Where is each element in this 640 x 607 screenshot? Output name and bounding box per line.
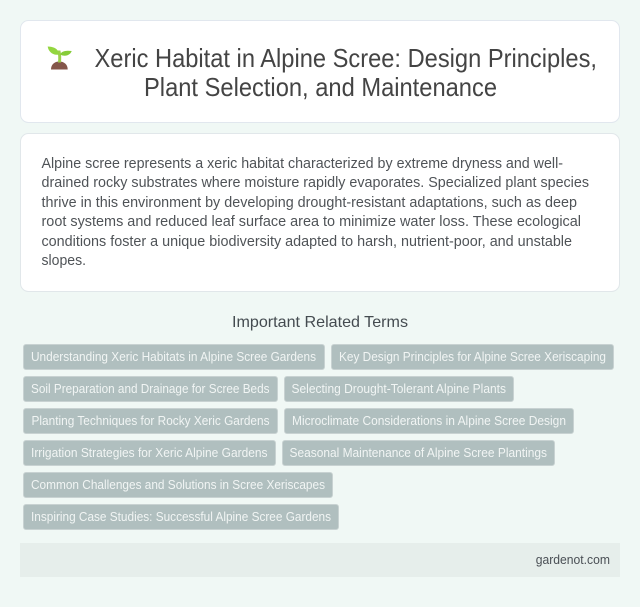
description text — [42, 155, 589, 269]
chip: Seasonal Maintenance of Alpine Scree Plantings — [290, 445, 547, 460]
description text: conditions foster a unique biodiversity adapted to harsh, nutrient-poor, and unstable — [42, 233, 572, 250]
chip: Common Challenges and Solutions in Scree Xeriscapes — [31, 477, 325, 492]
description text: thrive in this environment by developing drought-resistant adaptations, such as deep — [42, 194, 577, 211]
chip — [24, 504, 338, 530]
chip — [282, 440, 554, 466]
chip — [332, 344, 614, 370]
chip — [24, 440, 276, 466]
panel: related term chips — [24, 344, 614, 530]
footer source text: gardenot.com — [536, 552, 610, 567]
chip: Selecting Drought-Tolerant Alpine Plants — [292, 381, 506, 396]
chip — [284, 376, 514, 402]
chip — [284, 408, 574, 434]
chip: Irrigation Strategies for Xeric Alpine Gardens — [31, 445, 268, 460]
description text: slopes. — [42, 252, 86, 269]
footer bar — [20, 543, 620, 577]
title line 2: Plant Selection, and Maintenance — [144, 72, 497, 102]
chip: Microclimate Considerations in Alpine Scree Design — [292, 413, 566, 428]
heading: important related terms: Important Related Terms — [232, 314, 408, 331]
chip: Inspiring Case Studies: Successful Alpine Scree Gardens — [31, 509, 331, 524]
description text: drained rocky substrates where moisture rapidly evaporates. Specialized plant species — [42, 174, 589, 191]
chip — [24, 472, 332, 498]
description text: root systems and reduced leaf surface area to minimize water loss. These ecological — [42, 213, 581, 230]
chip: Soil Preparation and Drainage for Scree Beds — [31, 381, 270, 396]
chip: Planting Techniques for Rocky Xeric Gardens — [32, 413, 270, 428]
description text: Alpine scree represents a xeric habitat characterized by extreme dryness and well- — [42, 155, 563, 172]
chip: Key Design Principles for Alpine Scree Xeriscaping — [339, 349, 606, 364]
panel: title card — [20, 20, 620, 122]
title line 1: Xeric Habitat in Alpine Scree: Design Principles, — [94, 43, 597, 73]
chip — [24, 344, 324, 370]
chip — [24, 408, 278, 434]
panel: description card — [20, 134, 620, 292]
icon: seedling — [48, 46, 72, 70]
chip — [24, 376, 278, 402]
chip: Understanding Xeric Habitats in Alpine Scree Gardens — [31, 349, 316, 364]
